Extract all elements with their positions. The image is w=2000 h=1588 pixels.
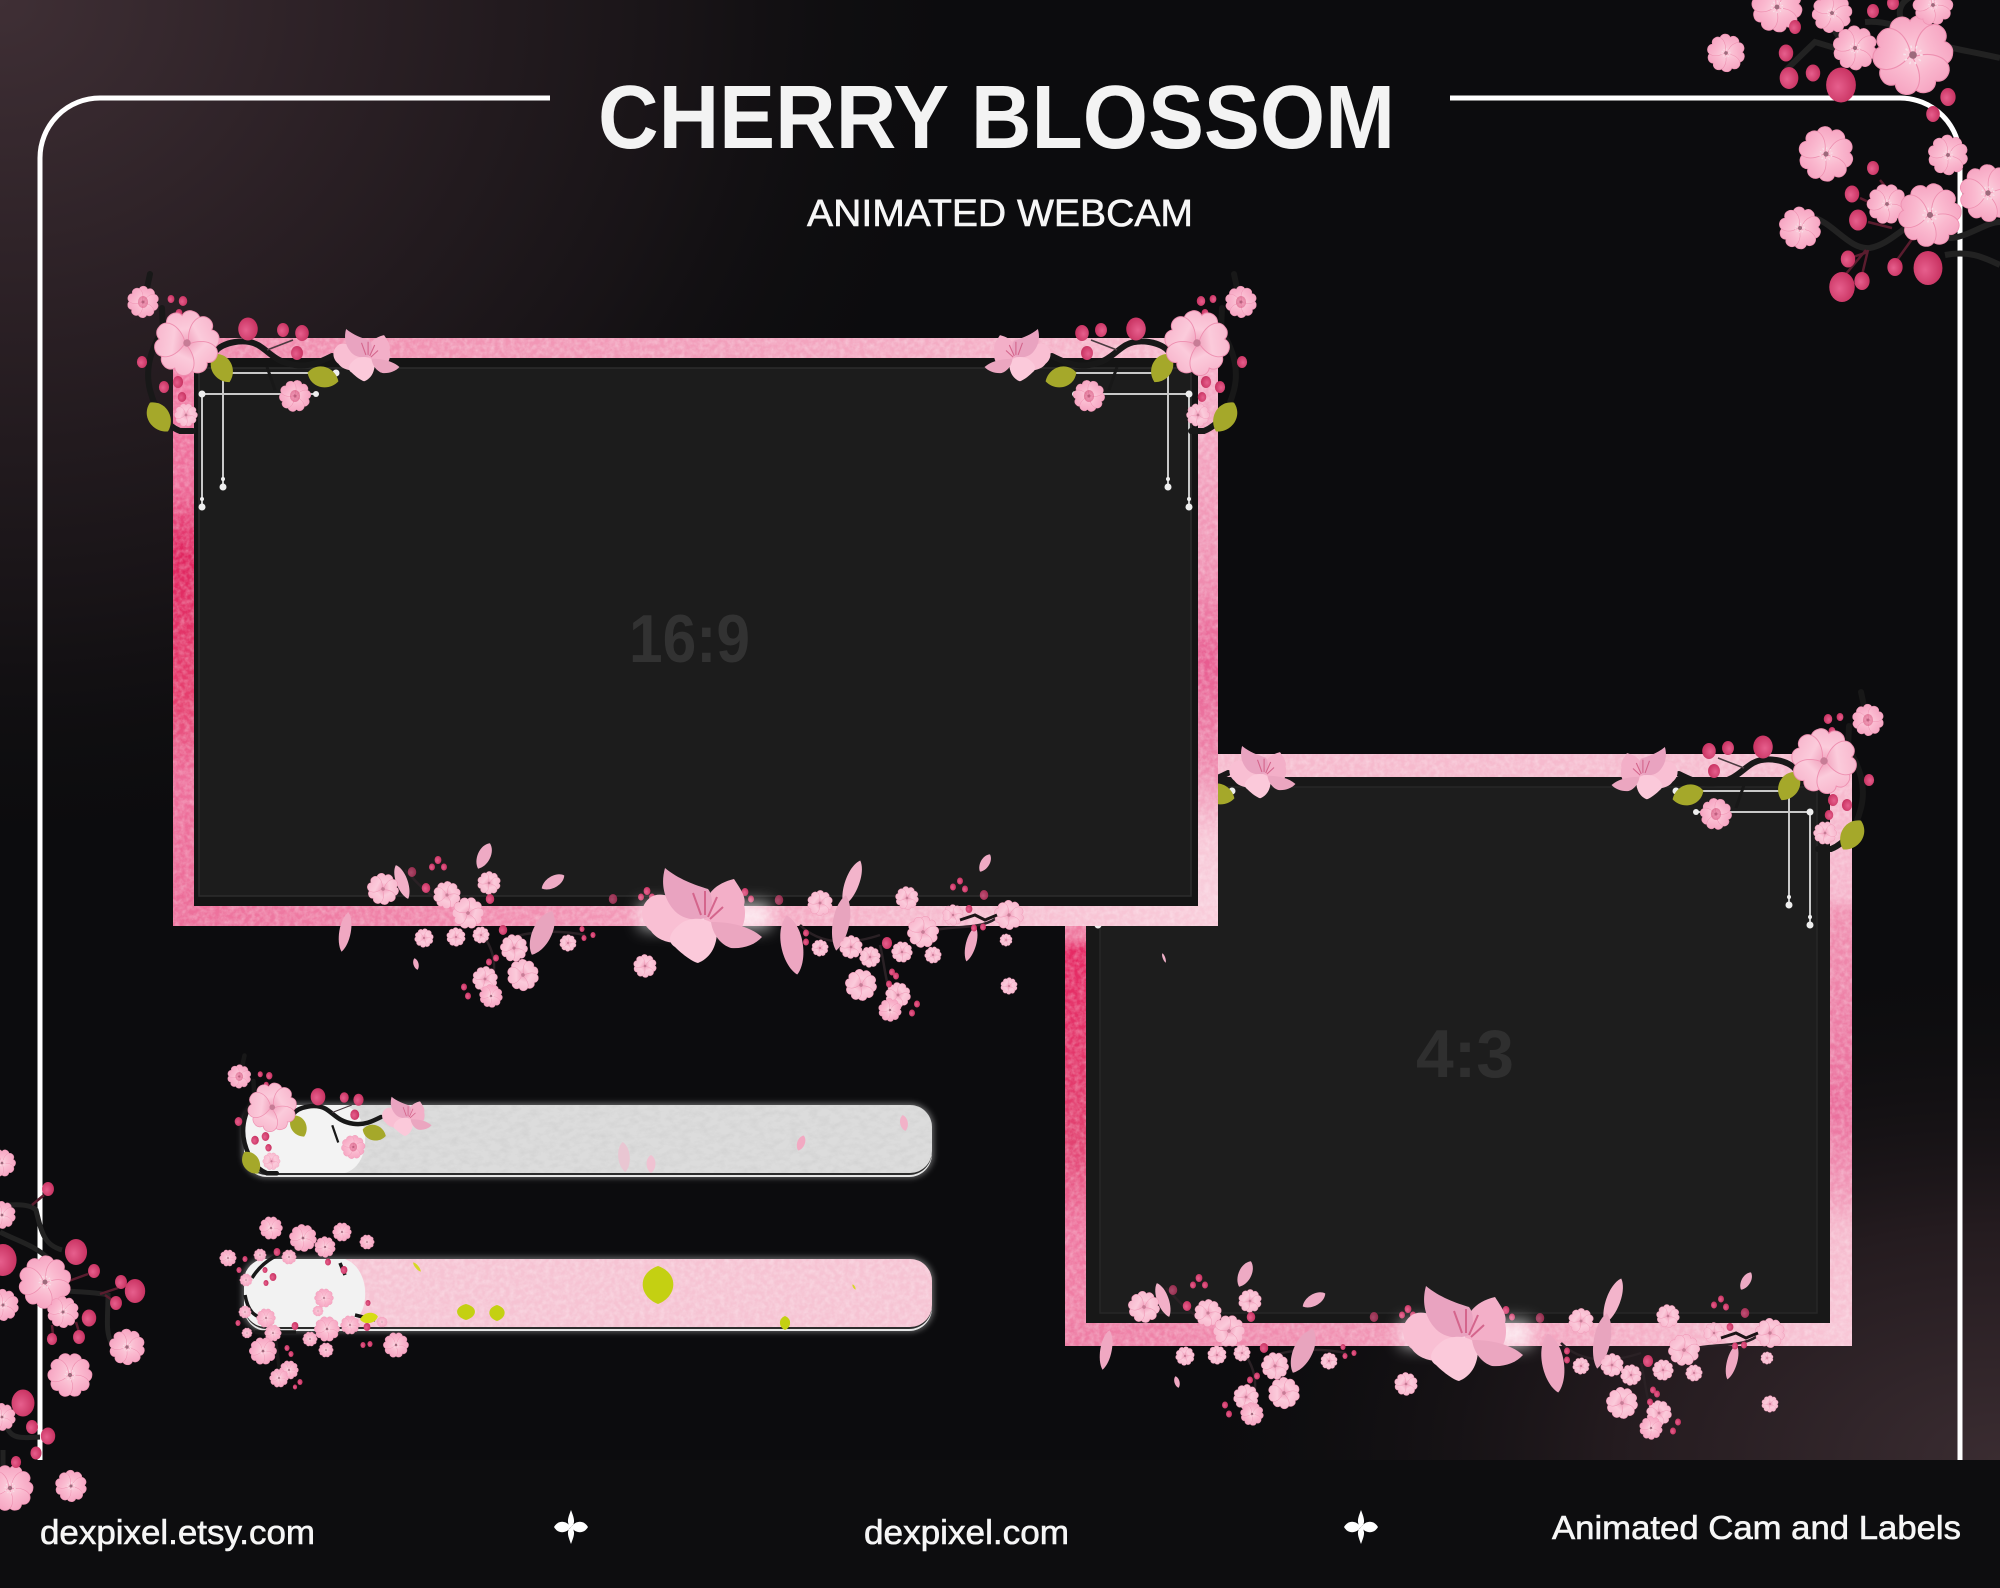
corner brackets <box>1094 788 1814 928</box>
floral corner <box>223 1056 432 1178</box>
stray petal <box>1161 953 1167 963</box>
panel: 16:9 webcam frame <box>121 274 1263 1025</box>
footer text: etsy: dexpixel.etsy.com <box>40 1514 315 1552</box>
inner screen line <box>1100 787 1817 1313</box>
title: CHERRY BLOSSOM <box>598 68 1395 168</box>
floral corners <box>121 274 1263 437</box>
inner screen line <box>199 368 1191 896</box>
ratio label 16:9: 16:9 <box>629 601 750 677</box>
bar <box>244 1105 932 1177</box>
icon: sparkle right <box>1344 1510 1378 1544</box>
glow <box>242 1103 934 1178</box>
screen <box>1086 777 1830 1323</box>
floral garland <box>336 841 1028 1025</box>
white end cap <box>244 1105 365 1173</box>
pink frame <box>173 338 1218 926</box>
screen <box>194 358 1198 906</box>
floral garland <box>1097 1259 1789 1443</box>
white end cap <box>244 1259 365 1327</box>
petals <box>617 1114 909 1173</box>
blossom branch: bottom left corner <box>0 1150 150 1513</box>
pink frame <box>1065 754 1852 1346</box>
glow <box>242 1257 934 1332</box>
green petals <box>412 1261 856 1330</box>
floral wreath <box>219 1217 410 1390</box>
footer text: product: Animated Cam and Labels <box>1552 1509 1961 1546</box>
panel: white name label <box>223 1056 934 1178</box>
ratio label 4:3: 4:3 <box>1416 1016 1514 1092</box>
bar <box>244 1259 932 1331</box>
blossom branch: top right corner <box>1701 0 2000 302</box>
floral corners <box>1017 691 1890 855</box>
panel: pink name label <box>219 1217 934 1390</box>
panel: 4:3 webcam frame <box>1017 691 1890 1443</box>
footer text: website: dexpixel.com <box>864 1514 1069 1552</box>
subtitle: ANIMATED WEBCAM <box>807 193 1193 235</box>
corner brackets <box>198 370 1192 510</box>
icon: sparkle left <box>554 1510 588 1544</box>
